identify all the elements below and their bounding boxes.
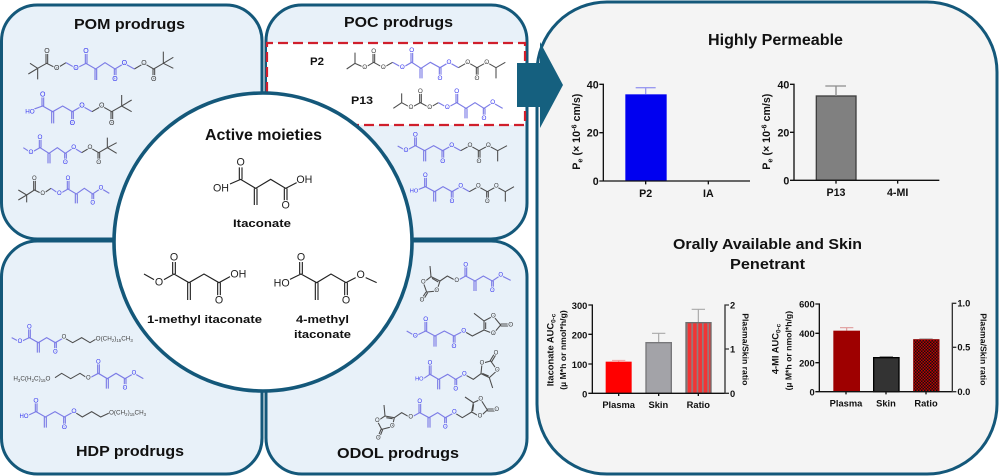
molecule: 1-methyl itaconate: O — [215, 294, 223, 306]
molecule: ODOL row 4: O — [417, 399, 422, 405]
label: P13: P13 — [351, 95, 373, 107]
bar chart: 4-MI AUC: 0.0 — [957, 387, 970, 397]
heading: HDP prodrugs: HDP prodrugs — [76, 443, 184, 460]
molecule: P13: O — [454, 88, 459, 95]
bar chart: 4-MI AUC: 1.0 — [957, 299, 970, 309]
panel: HDP prodrugs — [2, 241, 262, 474]
bar chart: P2 vs IA permeability: P2 — [639, 188, 652, 200]
bar chart: P13 vs 4-MI permeability: e — [765, 159, 774, 163]
molecule: P2: O — [371, 48, 376, 55]
molecule: ODOL row 3: O — [494, 350, 499, 356]
bar chart: itaconate AUC: Plasma — [602, 400, 636, 410]
molecule: POC row 4: O — [494, 184, 499, 190]
molecule: POC row 4: O — [423, 173, 428, 179]
molecule: HDP row 1: CH — [121, 336, 131, 343]
molecule: POM row 4: O — [40, 191, 45, 197]
bar chart: itaconate AUC: 1 — [730, 345, 735, 355]
molecule: HDP row 1: O — [53, 350, 58, 356]
molecule: ODOL row 4: O — [408, 415, 413, 421]
molecule: POC row 3 — [398, 131, 507, 165]
bar chart: 4-MI AUC: Ratio — [914, 399, 938, 409]
molecule: ODOL row 1: O — [463, 262, 468, 268]
molecule: POM row 4: O — [66, 176, 71, 182]
label: 4-methyl itaconate: 4-methyl — [296, 314, 349, 326]
molecule: HDP row 3: O — [33, 397, 39, 404]
molecule: HDP row 2: C) — [34, 376, 41, 383]
bar chart: itaconate AUC: 200 — [572, 330, 587, 340]
molecule: POM row 2: HO — [25, 108, 35, 115]
bar chart: 4-MI AUC: Plasma/Skin ratio — [979, 313, 989, 385]
bar chart: P13 vs 4-MI permeability: P13 — [827, 187, 846, 199]
molecule: ODOL row 3: O — [462, 371, 467, 377]
molecule: POM row 3: O — [88, 144, 93, 151]
molecule: ODOL row 4 — [375, 396, 499, 441]
molecule: 1-methyl itaconate: O — [170, 251, 178, 263]
heading: ODOL prodrugs: ODOL prodrugs — [337, 445, 459, 462]
bar chart: P2 vs IA permeability: e — [575, 159, 584, 163]
molecule: POM row 1: O — [54, 65, 60, 72]
molecule: HDP row 2: C(H — [20, 376, 32, 383]
molecule: POM row 2: O — [109, 120, 115, 127]
molecule: HDP row 1: 2 — [112, 338, 115, 343]
bar chart: P2 vs IA permeability: cm/s) — [571, 93, 583, 124]
molecule: ODOL row 4: O — [494, 407, 499, 413]
molecule: HDP row 3: ) — [128, 410, 130, 417]
label: P2: P2 — [310, 56, 324, 68]
molecule: ODOL row 1: O — [434, 288, 439, 294]
bar chart: 4-MI AUC: Skin — [876, 399, 896, 409]
molecule: ODOL row 2: O — [413, 332, 418, 339]
bar chart: itaconate AUC: 100 — [572, 360, 587, 370]
molecule: ODOL row 3: HO — [415, 376, 424, 382]
molecule: 4-methyl itaconate: O — [297, 252, 305, 264]
molecule: POM row 4: O — [99, 185, 104, 191]
molecule: POC row 3: O — [468, 142, 473, 149]
molecule: HDP row 3: CH — [135, 410, 144, 417]
molecule: 4-methyl itaconate: O — [357, 269, 365, 281]
bar chart: P2 vs IA permeability: P — [571, 163, 583, 170]
heading: Orally Available and Skin Penetrant: Penetrant — [730, 256, 805, 273]
bar chart: P13 vs 4-MI permeability: -6 — [759, 124, 768, 131]
molecule: ODOL row 2: O — [491, 330, 496, 337]
bar chart: itaconate AUC: Ratio — [687, 400, 710, 410]
molecule: P2: O — [409, 47, 414, 54]
label: Itaconate: Itaconate — [233, 218, 291, 230]
molecule: 4-methyl itaconate: O — [342, 295, 350, 307]
molecule: POM row 3: O — [38, 134, 43, 141]
molecule: 1-methyl itaconate: O — [155, 277, 163, 289]
molecule: P13: O — [418, 88, 423, 95]
molecule: ODOL row 4: O — [478, 414, 483, 420]
molecule: P13: O — [427, 104, 432, 111]
bar chart: P2 vs IA permeability: (× 10 — [571, 131, 583, 159]
bar chart: P13 vs 4-MI permeability: P — [761, 163, 773, 170]
molecule: HDP row 3: 15 — [130, 412, 135, 417]
molecule: ODOL row 3: O — [453, 386, 458, 392]
molecule: P2: O — [400, 64, 405, 71]
bar chart: itaconate AUC: Skin — [648, 400, 668, 410]
molecule: P2: O — [475, 75, 480, 82]
bar chart: 4-MI AUC: 0-c — [775, 323, 782, 333]
panel: POM prodrugs — [2, 5, 262, 239]
molecule: POC row 3: O — [477, 158, 482, 165]
molecule: HDP row 1: O — [18, 339, 23, 345]
arrow: prodrugs to results — [517, 42, 563, 128]
molecule: POC row 3: O — [486, 142, 491, 149]
molecule: P13: O — [482, 115, 487, 122]
molecule: ODOL row 4: O — [478, 396, 483, 402]
molecule: POM row 1: O — [44, 48, 50, 55]
molecule: ODOL row 1: O — [454, 278, 459, 284]
bar chart: 4-MI AUC: 600 — [799, 300, 815, 310]
molecule: HDP row 3: HO — [20, 414, 29, 420]
bar chart: 4-MI AUC: (µ M*h or nmol*h/g) — [784, 311, 794, 390]
bar chart: 4-MI AUC: 400 — [799, 329, 815, 339]
heading: Active moieties: Active moieties — [205, 127, 322, 144]
label: 4-methyl itaconate — [294, 314, 351, 341]
bar chart: 4-MI AUC: 0.5 — [957, 343, 970, 353]
molecule: POM row 1: O — [151, 76, 157, 83]
molecule: POC row 4: O — [485, 199, 490, 205]
molecule: POM row 3: O — [63, 159, 68, 166]
molecule: ODOL row 4: O — [443, 425, 448, 431]
molecule: HDP row 3: O — [62, 424, 67, 431]
molecule: POM row 1: O — [122, 60, 128, 67]
molecule: POM row 3: O — [71, 144, 76, 151]
molecule: P2 — [347, 47, 505, 82]
molecule: HDP row 2: O — [96, 360, 101, 366]
molecule: POM row 4: O — [57, 191, 62, 197]
molecule: POM row 3: O — [96, 159, 101, 166]
molecule: ODOL row 3 — [415, 350, 500, 392]
molecule: POM row 2: O — [79, 102, 85, 109]
molecule: ODOL row 3: O — [495, 367, 500, 373]
molecule: HDP row 2: 2 — [32, 378, 35, 383]
molecule: POM row 2 — [25, 91, 132, 127]
molecule: itaconate — [213, 157, 312, 212]
molecule: ODOL row 3: O — [428, 361, 433, 367]
molecule: HDP row 2: H — [13, 376, 18, 383]
label: 4-methyl itaconate: itaconate — [294, 329, 351, 341]
molecule: HDP row 3 — [20, 397, 147, 431]
molecule: ODOL row 1: O — [498, 272, 503, 278]
molecule: 4-methyl itaconate — [274, 252, 377, 307]
bar chart: itaconate AUC: 0-c — [550, 313, 557, 323]
molecule: POM row 1: O — [141, 60, 147, 67]
molecule: ODOL row 1: O — [421, 280, 426, 286]
bar chart: P13 vs 4-MI permeability: (× 10 — [761, 131, 773, 159]
molecule: P2: O — [465, 59, 470, 66]
molecule: P13: O — [445, 104, 450, 111]
molecule: POC row 3: O — [413, 131, 418, 138]
heading: Orally Available and Skin Penetrant — [673, 236, 862, 273]
molecule: HDP row 2: O — [86, 376, 91, 382]
molecule: ODOL row 2: O — [491, 312, 496, 319]
molecule: POM row 2: O — [99, 102, 105, 109]
bar chart: 4-MI AUC: Plasma — [830, 399, 863, 409]
bar chart: itaconate AUC — [545, 301, 750, 410]
molecule: P2: O — [447, 59, 452, 66]
bar chart: P2 vs IA permeability: 0 — [593, 176, 599, 188]
molecule: POC row 3: O — [440, 158, 445, 165]
molecule: HDP row 3: 2 — [125, 412, 128, 417]
molecule: HDP row 1: O — [62, 335, 67, 341]
molecule: ODOL row 4: O — [375, 418, 380, 424]
bar chart: P13 vs 4-MI permeability: 40 — [777, 80, 789, 92]
molecule: ODOL row 1: O — [420, 297, 425, 303]
molecule: HDP row 2: O — [132, 370, 137, 376]
bar chart: P13 vs 4-MI permeability: 0 — [783, 175, 789, 187]
molecule: POC row 3: O — [449, 142, 454, 149]
molecule: HDP row 1: O(CH — [96, 336, 112, 343]
molecule: HDP row 2: 15 — [41, 378, 46, 383]
bar chart: itaconate AUC: Itaconate AUC — [545, 323, 555, 386]
bar chart: P13 vs 4-MI permeability: 20 — [777, 127, 789, 139]
panel: results — [537, 2, 997, 474]
molecule: HDP row 1: O — [27, 325, 32, 331]
molecule: POC row 4: O — [476, 184, 481, 190]
molecule: ODOL row 2: O — [452, 343, 457, 350]
callout: red dashed highlight box — [267, 43, 525, 125]
bar chart: 4-MI AUC: 200 — [799, 358, 815, 368]
heading: POM prodrugs: POM prodrugs — [74, 16, 185, 33]
panel: POC prodrugs — [266, 5, 527, 239]
molecule: ODOL row 2: O — [423, 316, 428, 323]
bar chart: P2 vs IA permeability: 40 — [587, 80, 599, 92]
molecule: POC row 4: O — [458, 184, 463, 190]
bar chart: 4-MI AUC: 0 — [809, 387, 815, 397]
molecule: POM row 3 — [23, 134, 117, 166]
molecule: POM row 1: O — [73, 65, 79, 72]
molecule: P13: O — [409, 104, 414, 111]
molecule: P2: O — [484, 59, 489, 66]
molecule: itaconate: O — [282, 200, 290, 212]
molecule: itaconate: OH — [213, 183, 229, 195]
molecule: HDP row 1 — [12, 325, 133, 356]
molecule: POM row 1 — [28, 48, 173, 83]
molecule: ODOL row 4: O — [390, 424, 395, 430]
molecule: POC row 4 — [410, 173, 514, 205]
molecule: P13: O — [490, 99, 495, 106]
bar chart: 4-MI AUC — [770, 299, 989, 409]
molecule: P2: O — [362, 64, 367, 71]
bar chart: P13 vs 4-MI permeability: cm/s) — [761, 93, 773, 124]
bar chart: P2 vs IA permeability: -6 — [569, 124, 578, 131]
molecule: itaconate: OH — [296, 174, 312, 186]
molecule: ODOL row 1 — [420, 262, 511, 303]
heading: Highly Permeable: Highly Permeable — [708, 32, 843, 49]
molecule: ODOL row 3: O — [480, 360, 485, 366]
molecule: 1-methyl itaconate: OH — [230, 268, 246, 280]
molecule: HDP row 2 — [13, 360, 143, 392]
molecule: POM row 2: O — [40, 91, 46, 98]
bar chart: P2 vs IA permeability: IA — [703, 188, 714, 200]
molecule: POM row 3: O — [29, 149, 34, 156]
panel: active moieties circle — [114, 93, 412, 391]
bar chart: 4-MI AUC: 4-MI AUC — [770, 333, 780, 374]
bar chart: itaconate AUC: 0 — [582, 389, 587, 399]
molecule: itaconate: O — [237, 157, 245, 169]
molecule: POM row 4 — [18, 176, 109, 206]
molecule: HDP row 3: O — [71, 408, 77, 415]
bar chart: P13 vs 4-MI permeability: 4-MI — [887, 187, 908, 199]
molecule: ODOL row 4: O — [376, 435, 381, 441]
molecule: HDP row 3: O(CH — [109, 410, 125, 417]
heading: Orally Available and Skin Penetrant: Orally Available and Skin — [673, 236, 862, 253]
bar chart: itaconate AUC: (µ M*h or nmol*h/g) — [558, 310, 568, 390]
bar chart: itaconate AUC: 300 — [572, 301, 587, 311]
molecule: HDP row 2: O — [46, 376, 51, 383]
bar chart: P13 vs 4-MI permeability — [759, 80, 939, 199]
molecule: POM row 2: O — [70, 120, 76, 127]
bar chart: P2 vs IA permeability — [569, 80, 750, 200]
molecule: 4-methyl itaconate: HO — [274, 277, 290, 289]
molecule: ODOL row 2: O — [508, 321, 513, 328]
molecule: ODOL row 2 — [407, 312, 513, 350]
molecule: POM row 4: O — [90, 200, 95, 206]
molecule: ODOL row 1: O — [490, 288, 495, 294]
molecule: POM row 1: O — [83, 48, 89, 55]
molecule: ODOL row 4: O — [452, 410, 457, 416]
panel: ODOL prodrugs — [266, 241, 527, 474]
bar chart: itaconate AUC: Plasma/Skin ratio — [740, 313, 750, 385]
molecule: POC row 4: O — [450, 199, 455, 205]
molecule: P2: O — [381, 64, 386, 71]
molecule: HDP row 2: O — [123, 386, 128, 392]
molecule: P2: O — [438, 75, 443, 82]
heading: POC prodrugs: POC prodrugs — [344, 14, 453, 31]
molecule: POC row 3: O — [404, 147, 409, 154]
bar chart: P2 vs IA permeability: 20 — [587, 128, 599, 140]
molecule: HDP row 2: 3 — [18, 378, 21, 383]
molecule: POM row 4: O — [32, 176, 37, 182]
molecule: HDP row 1: 3 — [130, 338, 133, 343]
molecule: POC row 4: HO — [410, 189, 419, 195]
label: 1-methyl itaconate: 1-methyl itaconate — [147, 314, 262, 326]
molecule: POM row 1: O — [112, 76, 118, 83]
molecule: HDP row 1: ) — [114, 336, 116, 343]
molecule: ODOL row 2: O — [461, 327, 466, 334]
molecule: P13 — [393, 88, 503, 122]
molecule: 1-methyl itaconate — [144, 251, 246, 306]
molecule: HDP row 1: 15 — [116, 338, 122, 343]
bar chart: itaconate AUC: 2 — [730, 301, 735, 311]
bar chart: itaconate AUC: 0 — [730, 389, 735, 399]
molecule: HDP row 3: 3 — [144, 412, 147, 417]
